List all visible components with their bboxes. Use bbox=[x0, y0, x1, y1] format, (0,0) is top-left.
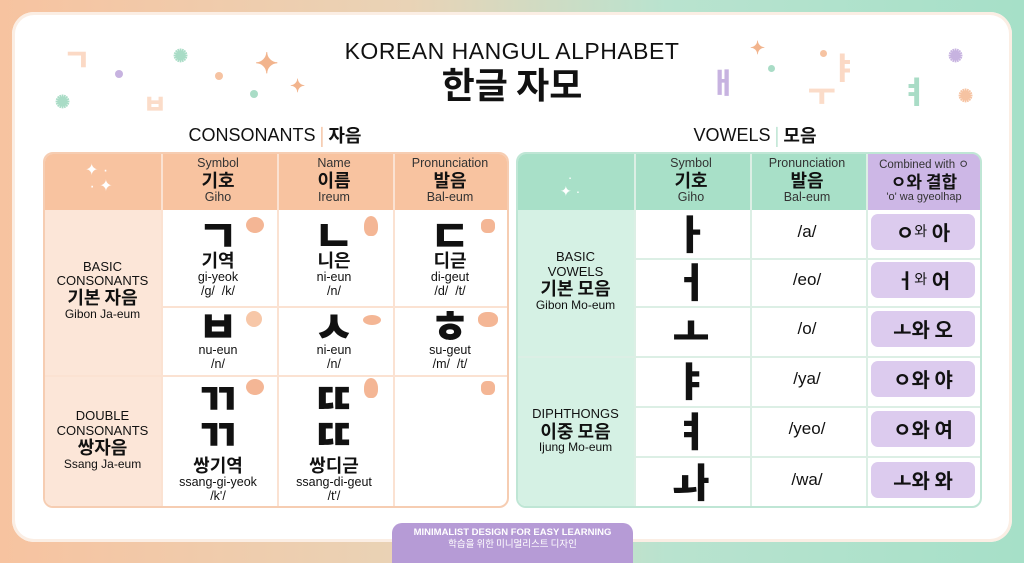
header sparkle vowels: ✦ · bbox=[560, 183, 580, 199]
vowel rows bbox=[673, 203, 975, 509]
header: symbol: Symbol bbox=[197, 156, 239, 170]
header: symbol bbox=[670, 156, 712, 204]
cell: hieut: ㅎ bbox=[430, 292, 470, 356]
label: diphthongs: Ijung Mo-eum bbox=[539, 440, 612, 454]
heading: consonants bbox=[188, 122, 362, 148]
header: pronunciation: 발음 bbox=[790, 167, 824, 193]
decorations left: ✺ bbox=[173, 42, 188, 68]
row: a: ㅇ 아 bbox=[896, 217, 950, 246]
cell: bieup: nu-eun bbox=[199, 343, 237, 357]
row: yeo: /yeo/ bbox=[789, 419, 825, 438]
cell: bieup: ㅂ bbox=[198, 292, 238, 356]
header: name: Name bbox=[317, 156, 351, 170]
row: eo: ㅓ 어 bbox=[896, 265, 950, 294]
label: double consonants: CONSONANTS bbox=[57, 422, 148, 438]
cell: giyeok: 기역 bbox=[201, 247, 235, 273]
heading: vowels: VOWELS bbox=[693, 125, 771, 145]
row: a: 와 bbox=[914, 221, 927, 241]
footer banner bbox=[392, 523, 633, 563]
header: symbol: 기호 bbox=[201, 167, 235, 193]
decorations right: ✺ bbox=[948, 42, 963, 68]
header sparkle vowels: · bbox=[568, 169, 572, 185]
label: basic consonants: BASIC bbox=[83, 259, 122, 274]
cell: ssanggiyeok bbox=[179, 364, 257, 503]
cell: hieut: su-geut bbox=[429, 343, 471, 357]
label: basic vowels: Gibon Mo-eum bbox=[536, 298, 615, 312]
cell: digeut: ㄷ bbox=[430, 201, 470, 265]
header: name bbox=[317, 156, 351, 204]
decorations left: ✦ bbox=[290, 72, 305, 98]
cell: nieun: /n/ bbox=[327, 284, 341, 298]
cell: ssangdigeut: ㄸ bbox=[314, 400, 354, 464]
label: basic vowels: VOWELS bbox=[548, 264, 603, 278]
row: eo: /eo/ bbox=[793, 270, 821, 289]
cell: ssanggiyeok: 쌍기역 bbox=[193, 452, 243, 478]
decorations right: ㅑ bbox=[830, 44, 858, 88]
heading: consonants: 자음 bbox=[328, 122, 362, 148]
decorations right bbox=[710, 34, 973, 114]
heading: vowels: 모음 bbox=[783, 122, 817, 148]
label: double consonants bbox=[57, 408, 148, 471]
label: diphthongs: DIPHTHONGS bbox=[532, 406, 619, 421]
label: double consonants: 쌍자음 bbox=[78, 434, 127, 460]
header: symbol bbox=[197, 156, 239, 204]
decorations right: ✦ bbox=[750, 34, 765, 60]
label: basic consonants: Gibon Ja-eum bbox=[65, 307, 140, 321]
row: o bbox=[673, 300, 975, 358]
header: name: Ireum bbox=[318, 190, 350, 204]
header sparkle bbox=[85, 162, 113, 195]
label: basic consonants: 기본 자음 bbox=[67, 284, 138, 310]
label: basic consonants: CONSONANTS bbox=[57, 273, 148, 288]
cell: nieun: ni-eun bbox=[317, 270, 351, 284]
cell: giyeok: /g/ /k/ bbox=[201, 284, 235, 298]
row: yeo: ㅕ bbox=[673, 400, 709, 458]
row: ya: ㅇ와 야 bbox=[893, 364, 953, 393]
cell: digeut: 디귿 bbox=[433, 247, 467, 273]
cell: nieun bbox=[314, 201, 354, 298]
cell: digeut: /d/ /t/ bbox=[434, 284, 466, 298]
header: pronunciation bbox=[769, 156, 845, 204]
decorations right: ㅕ bbox=[900, 68, 928, 112]
panel: consonants table bbox=[43, 152, 509, 508]
cell: ssanggiyeok: /k'/ bbox=[210, 489, 226, 503]
row: ya: /ya/ bbox=[793, 369, 821, 388]
row: eo bbox=[673, 251, 975, 309]
row: ya: ㅑ bbox=[673, 350, 709, 408]
cell: siot: ㅅ bbox=[314, 292, 354, 356]
heading: vowels bbox=[693, 122, 817, 148]
header: combined: Combined with ㅇ bbox=[879, 159, 969, 171]
header sparkle: · ✦ bbox=[89, 178, 113, 195]
row: o: ㅗ bbox=[673, 300, 709, 358]
cell: ssanggiyeok: ㄲ bbox=[198, 364, 238, 428]
row: yeo: ㅇ와 여 bbox=[893, 414, 953, 443]
footer banner: MINIMALIST DESIGN FOR EASY LEARNING bbox=[414, 527, 611, 538]
decorations left: ✺ bbox=[55, 88, 70, 114]
label: basic vowels bbox=[536, 249, 615, 312]
row: a: ㅏ bbox=[673, 203, 709, 261]
cell: nieun: ㄴ bbox=[314, 201, 354, 265]
footer banner: 학습을 위한 미니멀리스트 디자인 bbox=[448, 536, 577, 550]
header sparkle vowels bbox=[560, 169, 580, 199]
title: KOREAN HANGUL ALPHABET bbox=[345, 38, 679, 64]
cell: digeut bbox=[430, 201, 470, 298]
cell: digeut: di-geut bbox=[431, 270, 469, 284]
label: basic vowels: BASIC bbox=[556, 249, 595, 264]
cell: giyeok: ㄱ bbox=[198, 201, 238, 265]
cell: hieut: /m/ /t/ bbox=[433, 357, 467, 371]
header: pronunciation bbox=[412, 156, 488, 204]
row: a bbox=[673, 203, 975, 261]
cell: siot: ni-eun bbox=[317, 343, 351, 357]
label: double consonants: DOUBLE bbox=[76, 408, 129, 423]
decorations right: ✺ bbox=[958, 82, 973, 108]
cell: ssangdigeut: 쌍디귿 bbox=[309, 452, 359, 478]
heading: consonants: CONSONANTS bbox=[188, 125, 316, 145]
decorations left: ✦ bbox=[255, 42, 278, 82]
header: pronunciation: Pronunciation bbox=[412, 156, 488, 170]
header: combined bbox=[879, 159, 969, 203]
header: symbol: Symbol bbox=[670, 156, 712, 170]
label: double consonants: Ssang Ja-eum bbox=[64, 457, 141, 471]
header sparkle: ✦ · bbox=[85, 162, 108, 179]
cell: ssangdigeut: /t'/ bbox=[328, 489, 340, 503]
row: yeo bbox=[673, 400, 975, 458]
header: combined: ㅇ와 결합 bbox=[891, 168, 957, 193]
cell: nieun: 니은 bbox=[317, 247, 351, 273]
cell: ssanggiyeok: ㄲ bbox=[198, 400, 238, 464]
row: wa: ㅘ bbox=[673, 451, 709, 509]
decorations left: ㄱ bbox=[63, 36, 91, 80]
icons: peach illustrations bbox=[246, 216, 498, 398]
heading: consonants: | bbox=[320, 122, 324, 148]
row: wa: /wa/ bbox=[791, 470, 823, 489]
cell: siot: /n/ bbox=[327, 357, 341, 371]
label: basic vowels: 기본 모음 bbox=[540, 275, 611, 301]
decorations right: ㅜ bbox=[808, 70, 836, 114]
cell: ssangdigeut bbox=[296, 364, 372, 503]
header: pronunciation: Pronunciation bbox=[769, 156, 845, 170]
header: pronunciation: 발음 bbox=[433, 167, 467, 193]
row: o: /o/ bbox=[798, 319, 816, 338]
decorations right: ㅐ bbox=[710, 62, 736, 102]
label: diphthongs bbox=[532, 406, 619, 454]
header: name: 이름 bbox=[317, 167, 351, 193]
header: symbol: Giho bbox=[205, 190, 231, 204]
header: pronunciation: Bal-eum bbox=[427, 190, 473, 204]
header: pronunciation: Bal-eum bbox=[784, 190, 830, 204]
cell: giyeok bbox=[198, 201, 238, 298]
header: symbol: 기호 bbox=[674, 167, 708, 193]
row: wa: ㅗ와 와 bbox=[893, 465, 953, 494]
title: 한글 자모 bbox=[442, 57, 582, 109]
cell: ssangdigeut: ㄸ bbox=[314, 364, 354, 428]
row: eo: ㅓ bbox=[673, 251, 709, 309]
cell: giyeok: gi-yeok bbox=[198, 270, 238, 284]
row: a: /a/ bbox=[798, 222, 816, 241]
title bbox=[345, 38, 679, 109]
cell: ssanggiyeok: ssang-gi-yeok bbox=[179, 475, 257, 489]
label: diphthongs: 이중 모음 bbox=[540, 418, 611, 444]
header: combined: 'o' wa gyeolhap bbox=[886, 191, 962, 203]
heading: vowels: | bbox=[775, 122, 779, 148]
decorations left: ㅂ bbox=[143, 85, 167, 122]
row: o: ㅗ와 오 bbox=[893, 314, 953, 343]
row: ya bbox=[673, 350, 975, 408]
row: wa bbox=[673, 451, 975, 509]
header: symbol: Giho bbox=[678, 190, 704, 204]
decorations left bbox=[55, 36, 305, 122]
cell: ssangdigeut: ssang-di-geut bbox=[296, 475, 372, 489]
panel: vowels table bbox=[516, 152, 982, 508]
label: basic consonants bbox=[57, 259, 148, 321]
cell: bieup: /n/ bbox=[211, 357, 225, 371]
row: eo: 와 bbox=[914, 269, 927, 289]
